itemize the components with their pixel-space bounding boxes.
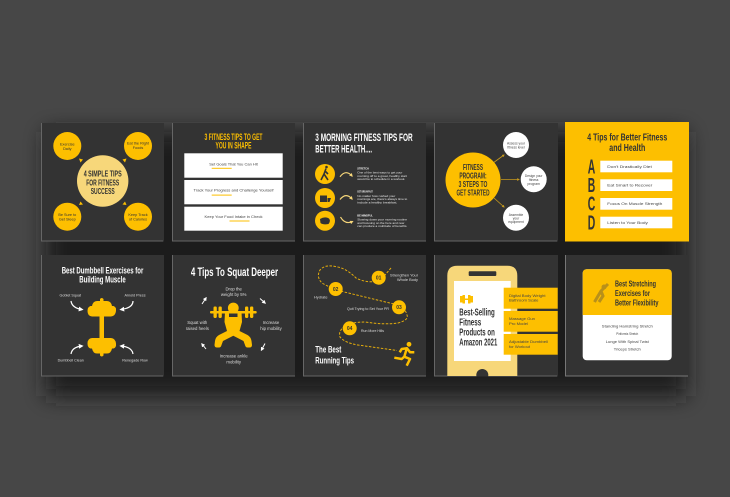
panel: stretching exercises — [565, 255, 689, 376]
panel: 3 morning fitness tips — [303, 123, 426, 242]
title: The Best — [315, 344, 342, 356]
step circles: Assemble — [509, 213, 523, 217]
title: Best-Selling — [459, 308, 495, 318]
step circles: Assess your — [507, 142, 526, 146]
heading — [204, 132, 263, 151]
squat tip labels: mobility — [226, 360, 242, 364]
cycle arrows — [202, 298, 265, 350]
curved arrows — [340, 173, 352, 223]
exercise labels: Goblet Squat — [60, 293, 81, 297]
squat tip labels: Increase ankle — [220, 354, 248, 358]
yellow header — [583, 269, 672, 315]
squat tip labels: hip mobility — [260, 326, 283, 331]
tip text: No matter how rushed your — [357, 194, 395, 198]
heading: BETTER HEALTH.... — [315, 143, 372, 155]
stretch list: Triceps Stretch — [614, 348, 641, 352]
heading: 4 Tips To Squat Deeper — [191, 265, 278, 279]
squat tip labels: Squat with — [187, 320, 208, 325]
tip rows: Focus On Muscle Strength — [607, 201, 662, 206]
tip text: morning off to a great, healthy start — [357, 174, 407, 178]
letters: D — [588, 212, 595, 234]
heading — [615, 278, 659, 308]
step markers: 01 — [376, 276, 382, 282]
icon circles — [315, 164, 335, 231]
tip circles: of Calories — [129, 218, 147, 222]
heading: 3 FITNESS TIPS TO GET — [204, 132, 263, 142]
panel: running tips — [303, 255, 426, 376]
tip boxes — [184, 153, 283, 231]
letters: C — [588, 193, 595, 215]
heading — [62, 265, 144, 284]
icon: runner — [394, 342, 414, 366]
center circle: 4 SIMPLE TIPS — [84, 169, 122, 179]
step markers: 04 — [347, 326, 353, 332]
icon: small dumbbell — [460, 295, 473, 304]
product boxes: for Workout — [509, 345, 530, 349]
stretch list: Piriformis Stretch — [616, 332, 638, 336]
panel: 4 tips yellow — [565, 122, 689, 242]
squat tip labels: raised heels — [186, 326, 209, 331]
title: Fitness — [459, 318, 482, 328]
tip circles: Exercise — [60, 142, 75, 146]
tip circles — [53, 132, 152, 231]
tip rows: Listen to Your Body — [607, 220, 648, 225]
tip text: Slowing down your morning routine — [357, 217, 407, 221]
product boxes — [504, 288, 558, 355]
tip text: would be to schedule in a workout. — [357, 177, 405, 181]
heading: 3 MORNING FITNESS TIPS FOR — [315, 132, 413, 144]
center circle: SUCCESS — [91, 186, 115, 196]
white card — [583, 269, 672, 360]
stretch list: Standing Hamstring Stretch — [602, 324, 653, 328]
tip circles: Foods — [133, 146, 143, 150]
main circle — [446, 152, 500, 208]
heading: Building Muscle — [79, 274, 126, 284]
step markers — [329, 271, 406, 335]
panel: squat tips — [172, 255, 295, 376]
step circles: fitness — [529, 178, 539, 182]
product boxes: Bathroom Scale — [509, 298, 538, 302]
step circles: program — [528, 182, 540, 186]
step circles: fitness level — [507, 145, 525, 149]
step markers: 03 — [396, 305, 402, 311]
pointer triangles — [79, 158, 126, 205]
tip circles: Keep Track — [128, 213, 148, 217]
step circles: equipment — [508, 220, 524, 224]
panel: 4 simple tips — [41, 123, 164, 242]
letters: A — [588, 157, 595, 179]
tip rows: Don't Drastically Diet — [607, 164, 653, 169]
title: Amazon 2021 — [459, 338, 498, 348]
heading: Best Stretching — [615, 278, 656, 288]
stretch list — [602, 324, 653, 352]
card shadows — [46, 132, 686, 396]
heading: Better Flexibility — [615, 298, 659, 308]
squat tip labels: Increase — [263, 320, 280, 325]
step labels: Strengthen Your — [390, 274, 419, 278]
phone — [447, 266, 517, 381]
tip boxes: Keep Your Food Intake in Check — [204, 215, 263, 219]
letters: B — [588, 175, 595, 197]
squat tip labels — [186, 286, 283, 364]
squat tip labels: Drop the — [225, 286, 243, 292]
tip text: mornings are, there's always time to — [357, 197, 408, 201]
tip rows — [600, 161, 672, 228]
tip boxes: Set Goals That You Can Hit — [209, 162, 259, 166]
title: Running Tips — [315, 356, 354, 366]
curved arrows — [71, 301, 133, 354]
tip circles: Daily — [63, 147, 72, 151]
main circle: FITNESS — [463, 162, 483, 172]
title — [459, 308, 498, 348]
exercise labels: Dumbbell Clean — [58, 358, 84, 362]
panel: 3 fitness tips — [172, 123, 295, 242]
step markers: 02 — [333, 287, 339, 293]
dashed route — [318, 266, 407, 350]
step labels: Quit Trying to Set Your PR — [347, 307, 389, 311]
exercise labels — [58, 293, 148, 362]
product boxes: Pro Model — [509, 322, 528, 326]
panel: dumbbell exercises — [41, 255, 164, 376]
heading — [315, 132, 413, 155]
exercise labels: Renegade Row — [122, 358, 148, 362]
icon: squatting figure with barbell — [210, 303, 257, 348]
title — [315, 344, 354, 366]
heading: Best Dumbbell Exercises for — [62, 265, 144, 275]
panel: fitness program — [434, 123, 558, 242]
heading: Exercises for — [615, 288, 650, 298]
main circle: 3 STEPS TO — [459, 179, 488, 189]
tip text: include a healthy breakfast. — [357, 200, 397, 204]
exercise labels: Arnold Press — [124, 293, 146, 297]
squat tip labels: weight by 5% — [221, 292, 247, 297]
product boxes: Adjustable Dumbbell — [509, 340, 548, 344]
tip rows: Eat Smart to Recover — [607, 183, 653, 188]
panel: best-selling products — [434, 255, 558, 381]
icon: stretching figure — [594, 284, 608, 302]
tip text: STRETCH — [357, 166, 369, 170]
tip text: One of the best ways to get your — [357, 170, 402, 174]
title: Products on — [459, 328, 495, 338]
tip text: and focusing on the here and now — [357, 221, 405, 225]
heading: and Health — [609, 142, 645, 154]
heading: YOU IN SHAPE — [216, 141, 252, 151]
arrows — [493, 155, 519, 207]
tip text: GET BREAKFAST — [357, 189, 373, 193]
heading: 4 Tips for Better Fitness — [587, 132, 667, 144]
tip circles: Get Sleep — [59, 218, 76, 222]
tip text — [357, 166, 408, 228]
stretch list: Lunge With Spinal Twist — [606, 340, 649, 344]
step labels: Hydrate — [314, 296, 328, 300]
step circles — [503, 132, 547, 231]
step labels: Whole Body — [397, 278, 418, 282]
main circle: PROGRAM: — [459, 170, 487, 180]
tip boxes: Track Your Progress and Challenge Yourself — [194, 188, 275, 192]
product boxes: Digital Body Weight — [509, 294, 546, 298]
center circle: FOR FITNESS — [86, 177, 119, 187]
heading — [587, 132, 667, 154]
icon: dumbbell — [88, 298, 116, 356]
tip text: BE MINDFUL — [357, 213, 373, 217]
step circles: your — [513, 216, 520, 220]
step circles: Design your — [525, 174, 543, 178]
tip text: can produce a multitude of benefits. — [357, 224, 407, 228]
letters — [588, 157, 595, 234]
center circle — [77, 155, 128, 207]
product boxes: Massage Gun — [509, 317, 535, 321]
main circle: GET STARTED — [456, 187, 490, 197]
tip circles: Eat the Right — [127, 142, 150, 146]
tip circles: Be Sure to — [58, 213, 76, 217]
step labels: Run More Hills — [361, 329, 384, 333]
step labels — [314, 274, 419, 333]
